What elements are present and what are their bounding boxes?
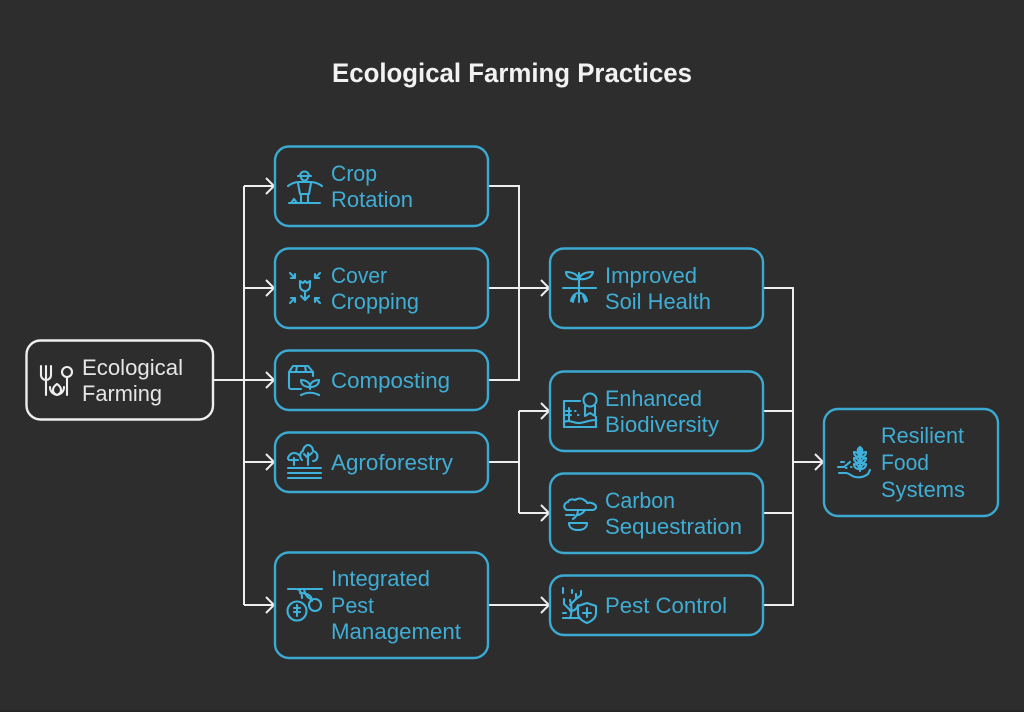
- label: Management: [331, 619, 462, 644]
- label: Systems: [881, 477, 965, 502]
- label: Carbon: [605, 488, 675, 513]
- icon: scarecrow: [288, 172, 322, 203]
- label: Biodiversity: [605, 412, 720, 437]
- label: Agroforestry: [331, 450, 454, 475]
- label: Soil Health: [605, 289, 711, 314]
- label: Cropping: [331, 289, 419, 314]
- label: Pest Control: [605, 593, 727, 618]
- connectors: practices to outcomes: [488, 186, 549, 613]
- label: Ecological: [82, 355, 183, 380]
- connectors: outcomes to resilient food systems: [763, 288, 823, 605]
- node: Agroforestry: [275, 432, 488, 492]
- icon: pest on vine: [288, 589, 322, 620]
- title: Ecological Farming Practices: [332, 58, 692, 88]
- icon: bonsai: [564, 498, 596, 530]
- label: Composting: [331, 368, 450, 393]
- label: Rotation: [331, 187, 413, 212]
- node: Carbon Sequestration: [550, 474, 763, 553]
- label: Integrated: [331, 566, 430, 591]
- node: Pest Control: [550, 576, 763, 635]
- icon: box with sprout: [289, 366, 319, 395]
- node: Resilient Food Systems: [824, 409, 998, 516]
- icon: certificate landscape: [564, 394, 596, 427]
- label: Pest: [331, 593, 375, 618]
- label: Improved: [605, 263, 697, 288]
- node: Composting: [275, 350, 488, 410]
- label: Enhanced: [605, 386, 702, 411]
- label: Resilient: [881, 423, 965, 448]
- node: Ecological Farming: [26, 340, 213, 420]
- node: Enhanced Biodiversity: [550, 372, 763, 451]
- node: Integrated Pest Management: [275, 552, 488, 658]
- icon: sprout with roots: [563, 272, 596, 302]
- node: Improved Soil Health: [550, 248, 763, 328]
- icon: plant with arrows: [290, 273, 320, 303]
- node: Crop Rotation: [275, 146, 488, 226]
- icon: trees and field: [288, 445, 321, 478]
- label: Cover: [331, 263, 387, 288]
- label: Food: [881, 450, 929, 475]
- icon: wheat and soil: [838, 447, 870, 477]
- label: Farming: [82, 381, 162, 406]
- label: Sequestration: [605, 514, 742, 539]
- node: Cover Cropping: [275, 248, 488, 328]
- icon: plant with shield: [563, 588, 596, 623]
- icon: fork and plant: [41, 366, 72, 395]
- label: Crop: [331, 161, 377, 186]
- connectors: source to practices: [213, 178, 274, 613]
